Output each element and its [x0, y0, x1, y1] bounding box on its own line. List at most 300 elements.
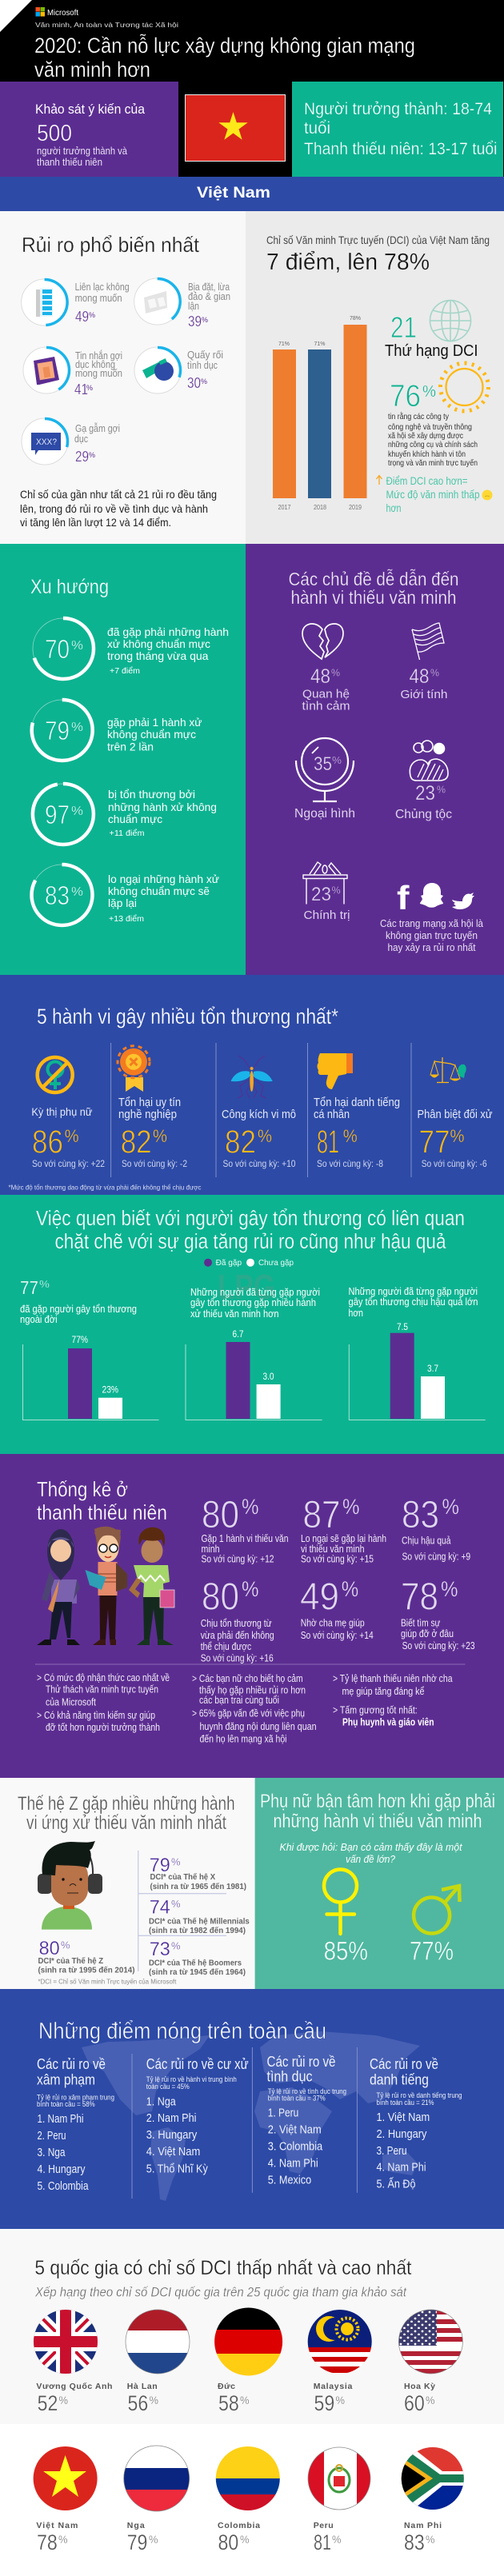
- icon: South African flag: [401, 2447, 465, 2510]
- country: Peru: [308, 2447, 370, 2554]
- stat: 83 percent consequences: [402, 1494, 470, 1563]
- icon: scales with speaker: [430, 1057, 466, 1083]
- column: behavioural risks: 3. Hungary: [146, 2129, 198, 2142]
- icon: message square: [34, 357, 59, 385]
- stat: 78 percent know where to get help: giúp đỡ ở đâu: [401, 1628, 454, 1639]
- topic: relationships: Quan hệ: [302, 688, 350, 701]
- behaviour: discrimination: Phân biệt đối xử: [418, 1108, 493, 1121]
- stat: boomers: DCI* của Thế hệ Boomers: [149, 1959, 242, 1968]
- stat: 80 percent harmed: thể chịu được: [201, 1641, 251, 1652]
- trend: 83 percent: không chuẩn mực sẽ: [108, 885, 210, 897]
- column: reputational risks: Tỷ lệ rủi ro về danh tiếng trung: [376, 2091, 462, 2099]
- topic: relationships: %: [331, 667, 340, 678]
- column: violation risks: 1. Nam Phi: [37, 2113, 83, 2126]
- column: behavioural risks: toàn cầu = 45%: [146, 2083, 190, 2091]
- heading: thanh thiếu niên: [37, 1500, 167, 1524]
- stat: 80 percent experienced incivility: 80: [202, 1494, 239, 1536]
- behaviour: professional reputation damage: [118, 1046, 187, 1169]
- statistic description: khuyến khích hành vi tôn: [388, 449, 466, 459]
- teen notes: column 1: > Có mức độ nhận thức cao nhất về: [37, 1672, 170, 1683]
- person: boy with green shirt: [129, 1528, 174, 1645]
- panel: survey size: [0, 82, 178, 177]
- topic: relationships: [302, 624, 350, 713]
- statistic description: công nghệ và truyền thông: [388, 422, 472, 432]
- behaviour: misogyny: Kỳ thị phụ nữ: [31, 1105, 92, 1118]
- country: United States: 60: [404, 2391, 425, 2415]
- person: girl in hijab: [37, 1529, 80, 1645]
- country: United Kingdom: %: [59, 2394, 68, 2406]
- stat: generation X: 79: [150, 1855, 170, 1876]
- stat: 77 percent met offender in real life: %: [39, 1278, 50, 1290]
- note: higher DCI means lower civility: Điểm DCI cao hơn=: [386, 474, 467, 487]
- icon: snapchat: [420, 883, 443, 908]
- statistic: women: 85%: [324, 1937, 368, 1966]
- column: behavioural risks: 5. Thổ Nhĩ Kỳ: [146, 2163, 208, 2176]
- risk: hoaxes, fraud and scams: %: [202, 316, 208, 324]
- behaviour: microaggressions: [222, 1056, 296, 1169]
- stat: generation Z: %: [61, 1939, 70, 1951]
- trend: 83 percent: %: [71, 885, 83, 899]
- watermark: LPG: [218, 1268, 275, 1307]
- risk: sexual harassment: 30: [187, 375, 201, 391]
- icon: rosette with cross: [118, 1046, 150, 1092]
- icon: phone: [36, 288, 53, 317]
- risk: unwanted contact: mong muốn: [75, 292, 122, 304]
- column: behavioural risks: 2. Nam Phi: [146, 2112, 197, 2125]
- bar chart: DCI by year: 71%: [314, 340, 326, 347]
- statistic: men: 77%: [410, 1937, 454, 1966]
- country: Netherlands: %: [149, 2394, 158, 2406]
- behaviour: personal reputation damage: Tổn hại danh tiếng: [314, 1096, 400, 1109]
- country: Malaysia: Malaysia: [314, 2382, 352, 2391]
- icon: sun: [440, 363, 488, 411]
- trend: 97 percent: những hành xử không: [108, 801, 217, 813]
- statistic description: xã hội sẽ xây dựng được: [388, 431, 463, 441]
- stat: generation X: DCI* của Thế hệ X: [150, 1872, 215, 1882]
- country: Netherlands: Hà Lan: [127, 2382, 158, 2391]
- generation divider lines: [138, 1851, 226, 1971]
- stat: boomers: (sinh ra từ 1945 đến 1964): [149, 1967, 246, 1977]
- social networks note: hay xảy ra rủi ro nhất: [387, 942, 476, 953]
- country banner: Việt Nam: [197, 184, 270, 202]
- stat: 77 percent met offender in real life: đã gặp người gây tổn thương: [20, 1304, 137, 1315]
- country: Colombia: Colombia: [218, 2521, 260, 2530]
- icon: Colombian flag: [215, 2446, 281, 2510]
- panel: teen statistics: [0, 1454, 504, 1778]
- country: South Africa: [401, 2447, 465, 2554]
- topic: politics: [303, 862, 350, 922]
- icon: crossed female symbol: [38, 1057, 73, 1092]
- heading: 5 hành vi gây nhiều tổn thương nhất*: [37, 1004, 338, 1028]
- behaviour: personal reputation damage: [314, 1053, 400, 1169]
- panel: knowing the offender: [0, 1195, 504, 1454]
- bar chart: consequences: 3.7: [427, 1364, 438, 1374]
- behaviour: microaggressions: Công kích vi mô: [222, 1108, 296, 1121]
- trend: 70 percent: +7 điểm: [110, 666, 140, 676]
- heading: Thống kê ở: [37, 1477, 128, 1501]
- stat: 83 percent consequences: Chịu hậu quả: [402, 1536, 451, 1547]
- survey question: [280, 1841, 463, 1865]
- trend: 83 percent: +13 điểm: [109, 914, 144, 924]
- survey question: vấn đề lớn?: [346, 1853, 396, 1865]
- column: sexual risks: tình dục: [267, 2069, 312, 2085]
- stat: 78 percent know where to get help: %: [441, 1577, 458, 1601]
- stat: 87 percent worry: So với cùng kỳ: +15: [301, 1554, 374, 1565]
- panel: age groups: [292, 82, 503, 177]
- bar chart: incivility count: [186, 1330, 322, 1420]
- topic: relationships: 48: [310, 665, 330, 688]
- country: Peru: Peru: [314, 2521, 334, 2530]
- stat: 80 percent experienced incivility: Gặp 1 hành vi thiếu văn: [202, 1533, 289, 1544]
- topic: race: %: [437, 784, 446, 795]
- heading: Rủi ro phổ biến nhất: [22, 233, 200, 257]
- text: greater consequences: gây tổn thương chịu hậu quả lớn: [349, 1296, 478, 1308]
- country: Vietnam: 78: [37, 2530, 58, 2554]
- statistic description: trọng và văn minh trực tuyến: [388, 458, 478, 468]
- stat: boomers: %: [171, 1940, 181, 1951]
- column: reputational risks: 5. Ấn Độ: [376, 2178, 416, 2191]
- country: South Africa: 83: [404, 2530, 425, 2554]
- column: sexual risks: Các rủi ro về: [267, 2054, 336, 2070]
- heading: [36, 1208, 465, 1253]
- teen notes: column 2: [192, 1673, 317, 1745]
- bar chart: DCI by year: 78%: [350, 314, 361, 322]
- trend: 79 percent: gặp phải 1 hành xử: [107, 716, 202, 729]
- risk: hoaxes, fraud and scams: Bịa đặt, lừa: [188, 282, 230, 293]
- country: Russia: [123, 2446, 190, 2554]
- stat: 87 percent worry: 87: [302, 1494, 341, 1536]
- country: South Africa: %: [426, 2533, 435, 2546]
- column: sexual risks: Tỷ lệ rủi ro về tình dục trung: [268, 2087, 346, 2095]
- stat: 80 percent experienced incivility: So với cùng kỳ: +12: [202, 1554, 274, 1565]
- icon: US flag: [398, 2310, 463, 2374]
- trend: 79 percent: %: [71, 721, 83, 734]
- stat: 80 percent experienced incivility: %: [242, 1495, 259, 1519]
- trend: 70 percent: trong tháng vừa qua: [107, 649, 209, 662]
- stat: 77 percent met offender in real life: [20, 1277, 137, 1325]
- legend: Chưa gặp: [258, 1258, 294, 1268]
- panel: survey size: 500: [37, 121, 72, 146]
- country: Peru: 81: [314, 2530, 331, 2554]
- column: behavioural risks: 4. Việt Nam: [146, 2146, 200, 2159]
- stat: 80 percent harmed: 80: [202, 1576, 239, 1619]
- person: boy with glasses and book: [85, 1527, 127, 1645]
- bar chart: DCI by year: 71%: [278, 340, 290, 347]
- risk: sexual solicitation: 29: [75, 449, 89, 465]
- stat: 49 percent asked parents: Nhờ cha mẹ giúp: [301, 1618, 365, 1629]
- panel: generation Z: [0, 1778, 255, 1989]
- teen notes: column 3: > Tấm gương tốt nhất:: [333, 1705, 418, 1716]
- trend: 79 percent: [32, 700, 202, 761]
- bar chart: DCI by year: [273, 314, 366, 511]
- stat: boomers: [149, 1939, 246, 1977]
- risk: unwanted contact: 49: [75, 309, 89, 325]
- trend: 79 percent: trên 2 lần: [107, 741, 154, 753]
- country: Russia: %: [149, 2533, 158, 2546]
- risk: unwanted contact: [22, 279, 130, 325]
- country: Malaysia: [307, 2310, 372, 2415]
- stat: millennials: DCI* của Thế hệ Millennials: [149, 1917, 250, 1927]
- panel: digital civility index: [246, 211, 504, 544]
- risk: unwanted contact: %: [89, 311, 95, 319]
- behaviour: discrimination: %: [450, 1126, 464, 1146]
- panel: survey size: người trưởng thành và: [37, 146, 127, 157]
- risk: unwanted sexting: Tin nhắn gợi: [75, 349, 122, 361]
- stat: millennials: [149, 1897, 250, 1935]
- icon: sad face: [482, 489, 493, 501]
- topic: gender: [400, 623, 448, 701]
- country: Vietnam: Việt Nam: [36, 2521, 78, 2530]
- stat: 49 percent asked parents: [300, 1576, 374, 1641]
- icon: facebook: f: [397, 879, 410, 917]
- risk: sexual solicitation: dục: [74, 433, 88, 445]
- stat: generation Z: DCI* của Thế hệ Z: [38, 1956, 104, 1966]
- heading: Thế hệ Z gặp nhiều những hành: [18, 1793, 235, 1815]
- column: sexual risks: 3. Colombia: [268, 2141, 323, 2154]
- legend: [204, 1258, 294, 1268]
- teen notes: column 3: > Tỷ lệ thanh thiếu niên nhờ cha: [333, 1673, 453, 1684]
- country: United States: [398, 2310, 463, 2415]
- trend: 97 percent: chuẩn mực: [108, 813, 162, 825]
- teen notes: column 2: > 65% gặp vấn đề với việc phụ: [192, 1708, 305, 1719]
- text: greater consequences: Những người đã từng gặp người: [349, 1286, 478, 1297]
- column: reputational risks: Các rủi ro về: [370, 2056, 438, 2072]
- behaviour: discrimination: 77: [419, 1124, 450, 1160]
- world map: [82, 2031, 420, 2201]
- trend: 79 percent: không chuẩn mực: [107, 728, 196, 741]
- trend: 97 percent: [33, 784, 217, 845]
- teen notes: column 2: huynh đăng nội dung liên quan: [200, 1721, 317, 1732]
- social networks note: [380, 879, 483, 953]
- icon: podium with microphones: [303, 862, 347, 904]
- trend: 83 percent: 83: [45, 881, 70, 910]
- trend: 83 percent: lặp lại: [108, 897, 137, 909]
- panel: topics that trigger incivility: [246, 544, 504, 975]
- behaviour: personal reputation damage: 81: [317, 1124, 339, 1160]
- country: Colombia: [215, 2446, 281, 2554]
- country: United Kingdom: 52: [38, 2391, 58, 2415]
- teen notes: column 2: đến họ lên mạng xã hội: [200, 1734, 286, 1745]
- stat: 78 percent know where to get help: Biết tìm sự: [401, 1618, 440, 1629]
- heading: [18, 1793, 235, 1834]
- trend: 83 percent: [32, 865, 219, 925]
- icon: Vietnam flag: [186, 94, 285, 162]
- column: behavioural risks: Tỷ lệ rủi ro về hành vi trung bình: [146, 2075, 237, 2083]
- column: behavioural risks: Các rủi ro về cư xử: [146, 2056, 249, 2072]
- country: United States: Hoa Kỳ: [404, 2382, 435, 2391]
- risk: unwanted sexting: 41: [74, 381, 88, 397]
- column: reputational risks: [370, 2056, 462, 2191]
- statistic description: tin rằng các công ty: [388, 411, 450, 421]
- trend: 79 percent: 79: [45, 716, 70, 745]
- icon: female symbol: [324, 1870, 357, 1934]
- text: more incivility: xử thiếu văn minh hơn: [190, 1308, 279, 1320]
- survey question: Khi được hỏi: Bạn có cảm thấy đây là một: [280, 1841, 463, 1853]
- stat: 77 percent met offender in real life: 77: [20, 1277, 38, 1298]
- topic: politics: %: [332, 885, 341, 897]
- topic: appearance: %: [332, 754, 342, 766]
- column: sexual risks: bình toàn cầu = 37%: [268, 2095, 326, 2103]
- heading: chặt chẽ với sự gia tăng rủi ro cũng như hậu quả: [54, 1231, 446, 1253]
- heading: hành vi thiếu văn minh: [291, 587, 456, 608]
- behaviour: microaggressions: %: [258, 1126, 272, 1146]
- topic: race: 23: [415, 782, 435, 805]
- risk: hoaxes, fraud and scams: lận: [188, 301, 199, 312]
- country: Germany: %: [240, 2394, 250, 2406]
- stat: 80 percent experienced incivility: minh: [202, 1544, 220, 1555]
- icon: German flag: [214, 2307, 283, 2376]
- panel: survey size: Khảo sát ý kiến của: [35, 102, 145, 117]
- topic: gender: %: [430, 667, 439, 678]
- risk: sexual harassment: %: [201, 377, 207, 385]
- trend: 70 percent: đã gặp phải những hành: [107, 625, 229, 638]
- icon: globe: [430, 301, 470, 341]
- behaviour: microaggressions: So với cùng kỳ: +10: [222, 1158, 296, 1169]
- icon: mirror: [296, 738, 354, 801]
- stat: 87 percent worry: %: [342, 1495, 360, 1519]
- note: higher DCI means lower civility: [386, 474, 480, 514]
- topic: gender: Giới tính: [400, 688, 448, 701]
- main title: văn minh hơn: [34, 58, 150, 82]
- statistic: 76 percent: 76: [390, 379, 421, 413]
- panel: age groups: Người trưởng thành: 18-74: [304, 100, 492, 118]
- risks summary paragraph: lên, trong đó rủi ro về về tình dục và hành: [20, 502, 208, 515]
- risk: unwanted sexting: mong muốn: [75, 368, 122, 379]
- social networks note: Các trang mạng xã hội là: [380, 918, 483, 929]
- stat: 83 percent consequences: So với cùng kỳ: +9: [402, 1552, 470, 1563]
- stat: generation X: %: [171, 1856, 181, 1868]
- subtitle: Văn minh, An toàn và Tương tác Xã hội: [35, 22, 178, 29]
- topic: race: [395, 741, 452, 821]
- icon: broken heart: [302, 624, 343, 659]
- behaviour: misogyny: [31, 1057, 105, 1169]
- text: more incivility: gây tổn thương gặp nhiều hành: [190, 1297, 316, 1308]
- icon: mosquito: [230, 1056, 273, 1098]
- teen notes: column 3: [333, 1673, 453, 1728]
- behaviour: discrimination: [418, 1057, 493, 1169]
- panel: global hotspots: [0, 1989, 504, 2229]
- icon: up arrow: [376, 475, 382, 485]
- stat: 80 percent harmed: So với cùng kỳ: +16: [201, 1653, 274, 1664]
- stat: generation X: (sinh ra từ 1965 đến 1981): [150, 1882, 246, 1891]
- risk: unwanted sexting: [23, 347, 122, 397]
- subheading: Xếp hạng theo chỉ số DCI quốc gia trên 25 quốc gia tham gia khảo sát: [34, 2285, 407, 2300]
- behaviour: personal reputation damage: %: [343, 1126, 358, 1146]
- note: higher DCI means lower civility: hơn: [386, 501, 402, 514]
- icon: thumbs down: [317, 1053, 353, 1089]
- column: sexual risks: [267, 2054, 346, 2187]
- behaviour: misogyny: 86: [32, 1124, 63, 1160]
- trend: 70 percent: %: [71, 639, 83, 653]
- bar chart: met offender: 77%: [72, 1336, 88, 1345]
- trend: 70 percent: 70: [45, 634, 70, 664]
- rank number: 21: [390, 311, 417, 344]
- trend: 83 percent: lo ngại những hành xử: [108, 873, 219, 885]
- bar chart: DCI by year: 2018: [314, 503, 326, 511]
- heading: [260, 1791, 495, 1832]
- country: Vietnam: [34, 2446, 98, 2554]
- panel: five most harmful behaviours: [0, 975, 504, 1195]
- icon: XXX speech bubble: XXX?: [36, 437, 57, 447]
- risk: sexual solicitation: Gạ gẫm gợi: [75, 422, 120, 434]
- icon: Russian flag: [124, 2468, 189, 2511]
- trend: 70 percent: xử không chuẩn mực: [107, 637, 210, 650]
- panel: age groups: tuổi: [304, 119, 330, 138]
- column: violation risks: Tỷ lệ rủi ro xâm phạm trung: [37, 2094, 114, 2102]
- legend: Đã gặp: [216, 1258, 242, 1268]
- teen notes: column 3: Phụ huynh và giáo viên: [342, 1717, 434, 1728]
- icon: Peruvian flag: [308, 2452, 370, 2506]
- country: United Kingdom: [34, 2310, 112, 2415]
- teen notes: column 1: > Có khả năng tìm kiếm sự giúp: [37, 1710, 155, 1721]
- panel: lowest DCI countries: [34, 2258, 463, 2410]
- topic: relationships: tình cảm: [302, 699, 350, 713]
- brand name: Microsoft: [47, 9, 78, 18]
- stat: 83 percent consequences: 83: [402, 1494, 439, 1536]
- risk: sexual harassment: tình dục: [187, 359, 218, 371]
- heading: vi ứng xử thiếu văn minh nhất: [26, 1812, 226, 1834]
- stat: generation Z: (sinh ra từ 1995 đến 2014): [38, 1966, 134, 1975]
- text: greater consequences: hơn: [349, 1308, 363, 1319]
- bar chart: consequences: 7.5: [397, 1323, 408, 1332]
- column: violation risks: Các rủi ro về: [37, 2056, 106, 2072]
- stat: 80 percent harmed: %: [242, 1577, 259, 1601]
- column: reputational risks: danh tiếng: [370, 2072, 429, 2088]
- risk: sexual harassment: [134, 347, 223, 393]
- column: behavioural risks: 1. Nga: [146, 2096, 177, 2109]
- topic: politics: Chính trị: [304, 909, 350, 922]
- column: violation risks: 2. Peru: [37, 2130, 66, 2143]
- stat: 80 percent harmed: vừa phải đến không: [201, 1630, 274, 1641]
- risk: sexual harassment: Quấy rối: [187, 349, 223, 361]
- column: reputational risks: bình toàn cầu = 21%: [376, 2099, 434, 2107]
- teen notes: column 1: [37, 1672, 170, 1733]
- panel: most common risks: [0, 211, 246, 544]
- bar chart: met offender: 23%: [102, 1386, 118, 1396]
- footnote: *DCI = Chỉ số Văn minh Trực tuyến của Microsoft: [38, 1978, 177, 1986]
- country: Netherlands: [126, 2310, 190, 2415]
- stat: 87 percent worry: [301, 1494, 386, 1565]
- behaviour: professional reputation damage: 82: [121, 1124, 152, 1160]
- country: Malaysia: %: [336, 2394, 345, 2406]
- bar chart: incivility count: 3.0: [262, 1372, 274, 1382]
- risk: hoaxes, fraud and scams: đảo & gian: [188, 291, 230, 302]
- country: United Kingdom: Vương Quốc Anh: [36, 2382, 112, 2391]
- stat: 78 percent know where to get help: So với cùng kỳ: +23: [402, 1640, 475, 1651]
- country: Malaysia: 59: [314, 2391, 334, 2415]
- panel: highest DCI countries: [34, 2446, 464, 2550]
- country: United States: %: [426, 2394, 435, 2406]
- country: Netherlands: 56: [128, 2391, 148, 2415]
- behaviour: microaggressions: 82: [225, 1124, 256, 1160]
- trend: 97 percent: %: [71, 805, 83, 818]
- country: Germany: Đức: [218, 2382, 235, 2391]
- risks summary paragraph: Chỉ số của gần như tất cả 21 rủi ro đều tăng: [20, 488, 217, 501]
- panel: survey size: thanh thiếu niên: [37, 157, 102, 168]
- country: South Africa: Nam Phi: [404, 2521, 442, 2530]
- heading: Xu hướng: [30, 576, 109, 598]
- social networks note: không gian trực tuyến: [386, 930, 478, 941]
- column: sexual risks: 1. Peru: [268, 2107, 298, 2120]
- icon: Microsoft logo: [35, 7, 45, 16]
- footnote: *Mức độ tổn thương dao động từ vừa phải đến không thể chịu được: [8, 1184, 202, 1192]
- country: Peru: %: [332, 2533, 341, 2546]
- note: higher DCI means lower civility: Mức độ văn minh thấp: [386, 488, 480, 501]
- heading: [37, 1477, 167, 1524]
- risk: sexual solicitation: %: [89, 451, 95, 459]
- behaviour: misogyny: %: [65, 1126, 79, 1146]
- behaviour: discrimination: So với cùng kỳ: -6: [422, 1158, 487, 1169]
